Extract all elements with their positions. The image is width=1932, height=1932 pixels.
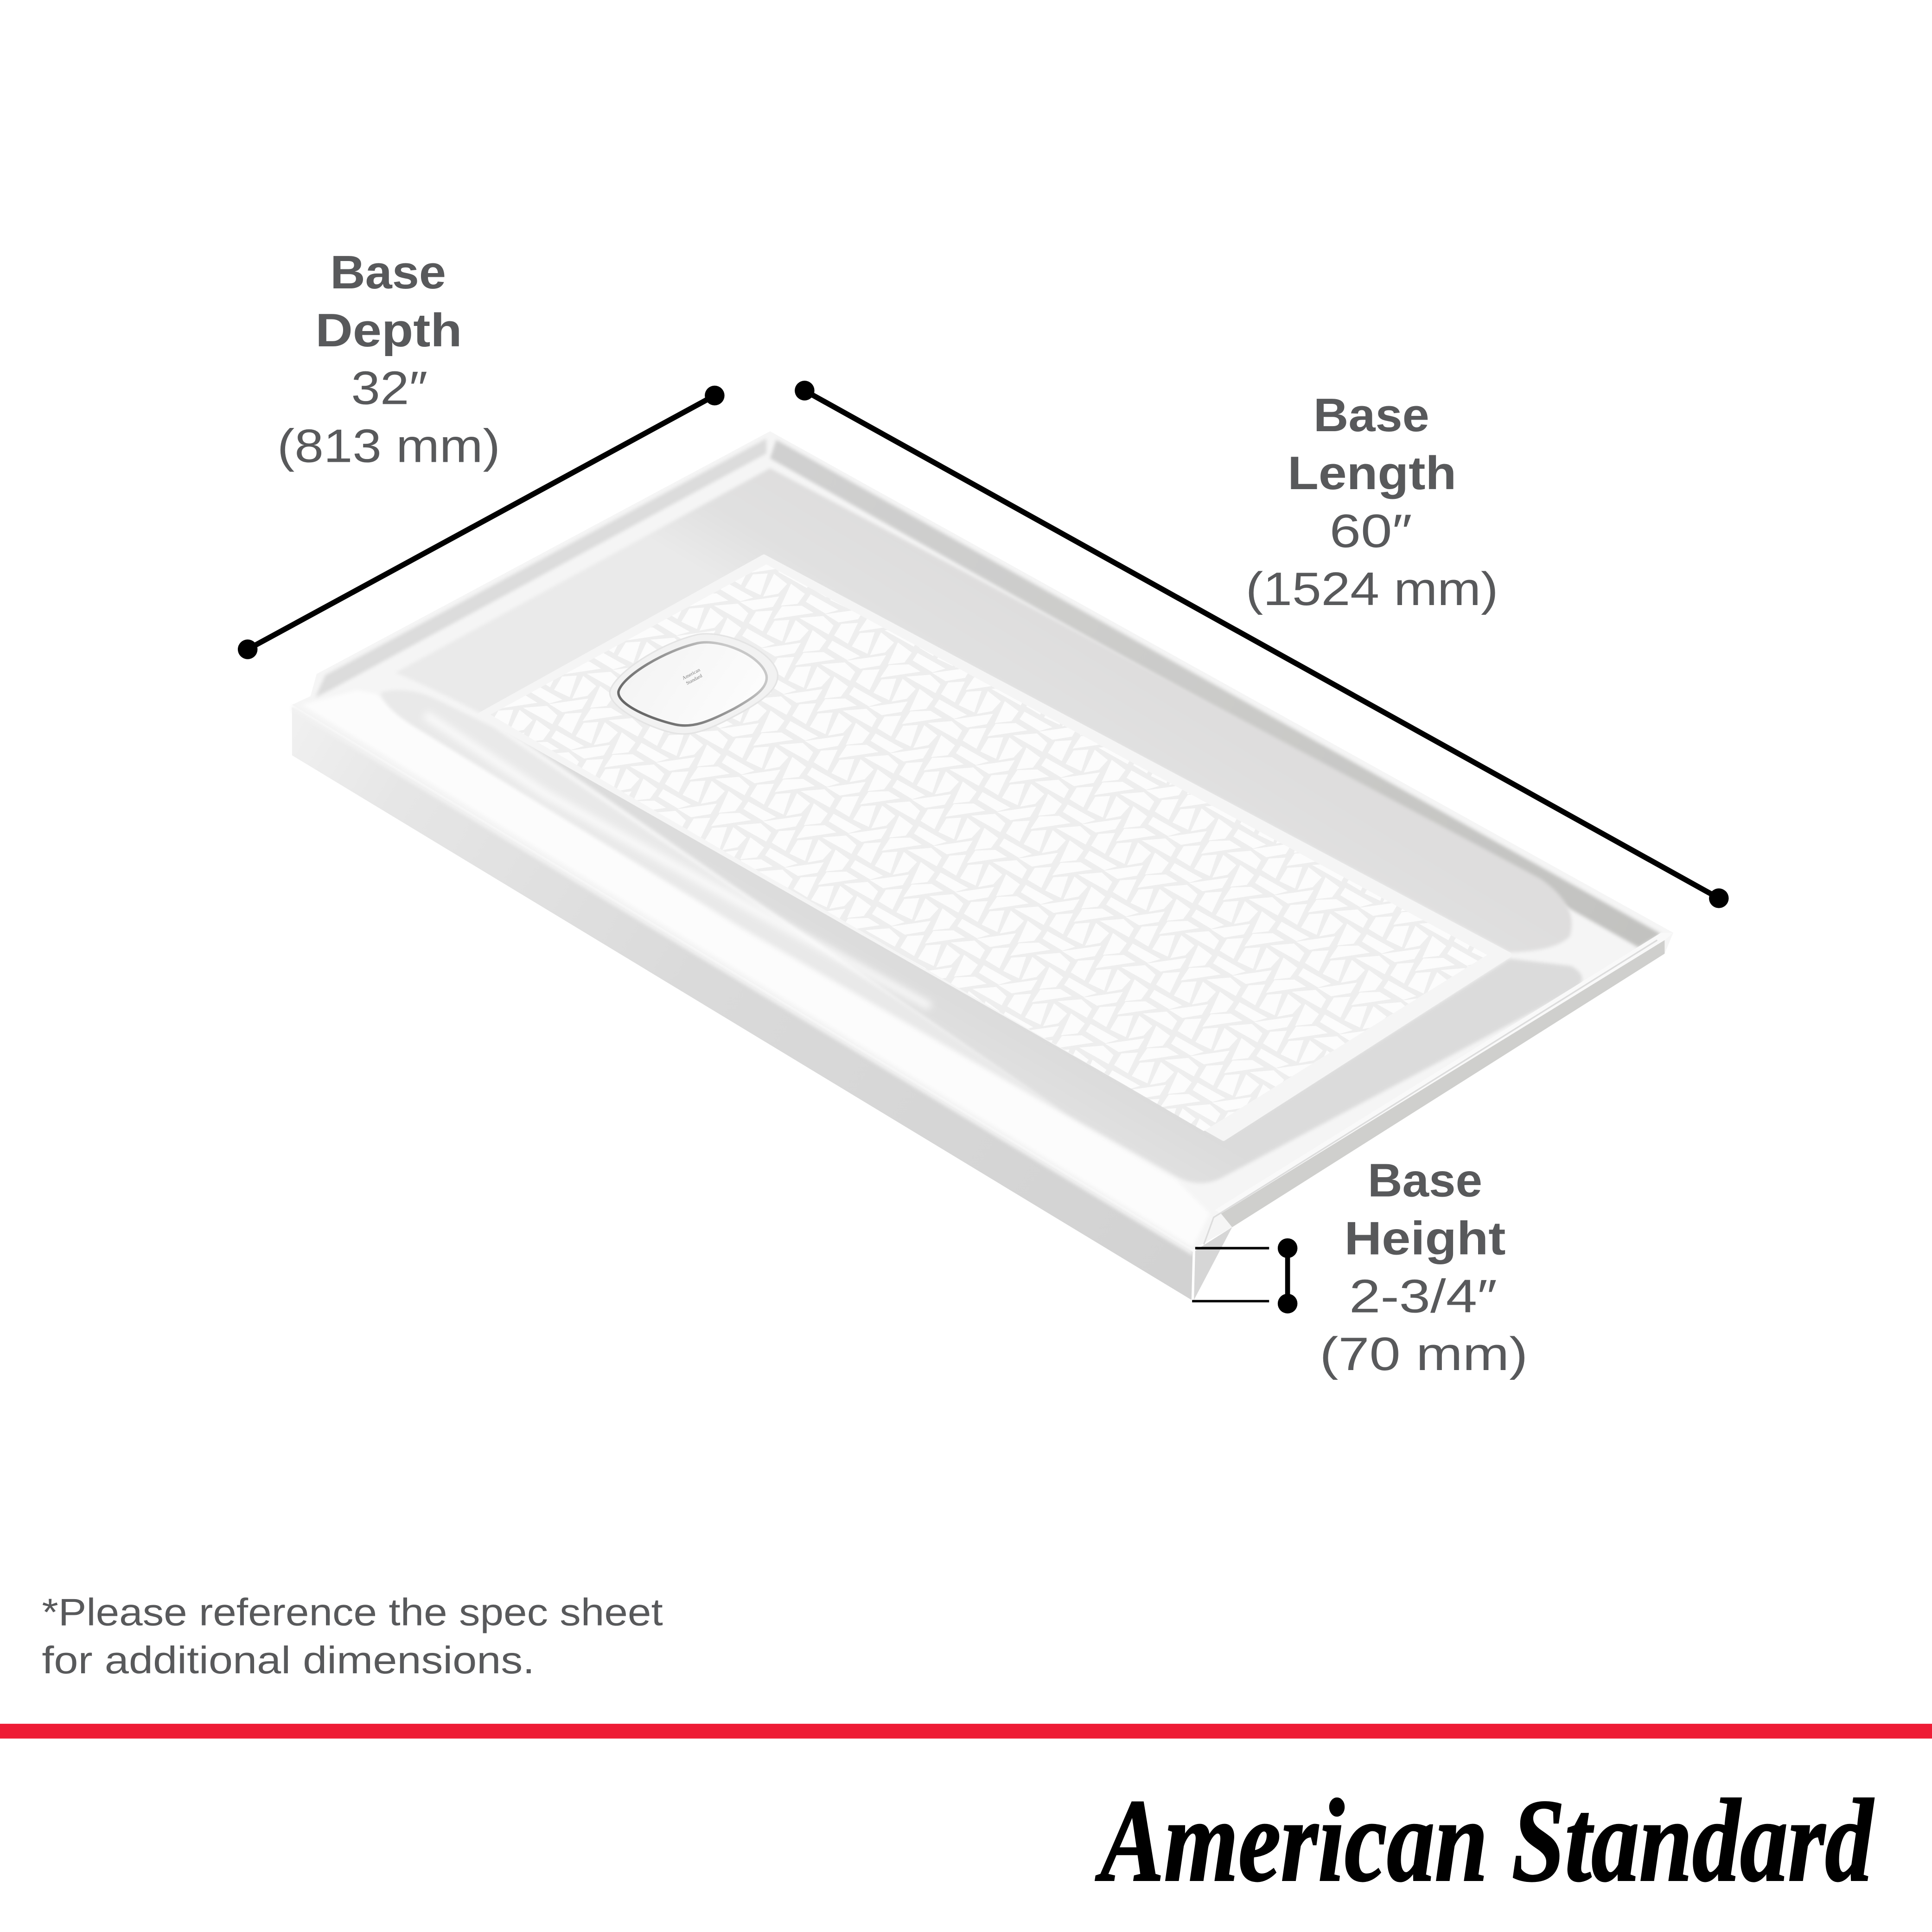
label: base height bbox=[1320, 1154, 1528, 1380]
label: base height: 2-3/4″ bbox=[1349, 1270, 1497, 1322]
label: base depth: (813 mm) bbox=[277, 421, 500, 472]
back wall band bbox=[770, 440, 1661, 948]
threshold top bbox=[302, 690, 1210, 1247]
drain cover bbox=[618, 642, 767, 726]
threshold highlight bbox=[425, 714, 930, 1007]
right rim bbox=[1215, 933, 1673, 1214]
floor tread pattern bbox=[1127, 1086, 1205, 1131]
footnote: for additional dimensions. bbox=[42, 1639, 535, 1682]
label: base height: Height bbox=[1344, 1212, 1505, 1264]
right rim inner line bbox=[1204, 940, 1657, 1244]
label: base height: (70 mm) bbox=[1320, 1328, 1528, 1380]
label: base depth bbox=[277, 247, 500, 472]
label: base length: 60″ bbox=[1329, 505, 1412, 557]
dimension line: base length bbox=[795, 381, 1729, 908]
drain logo: American bbox=[682, 667, 701, 681]
label: base depth: Depth bbox=[315, 305, 462, 357]
drain logo bbox=[682, 667, 704, 687]
dimension line: base height bbox=[1192, 1238, 1297, 1314]
shower base tray bbox=[292, 431, 1673, 1300]
footnote bbox=[42, 1591, 663, 1682]
right outer face bbox=[1221, 940, 1664, 1227]
label: base length bbox=[1246, 389, 1498, 615]
label: base length: Length bbox=[1288, 447, 1456, 499]
end wedge bbox=[1194, 1227, 1232, 1300]
textured floor bbox=[480, 557, 1509, 1139]
drain surround bbox=[610, 634, 778, 734]
dimension line: base depth bbox=[238, 386, 725, 659]
footnote: *Please reference the spec sheet bbox=[42, 1591, 663, 1633]
lower basin slope bbox=[491, 718, 1582, 1183]
tray silhouette bbox=[292, 431, 1673, 1250]
label: base length: (1524 mm) bbox=[1246, 563, 1498, 615]
label: base depth: 32″ bbox=[351, 363, 427, 414]
label: base depth: Base bbox=[330, 247, 446, 299]
front face bbox=[292, 707, 1192, 1300]
depth wall band bbox=[315, 439, 766, 697]
label: base height: Base bbox=[1368, 1154, 1482, 1206]
drain logo: Standard bbox=[685, 673, 703, 686]
label: base length: Base bbox=[1314, 389, 1429, 441]
front bevel bbox=[292, 705, 1192, 1256]
threshold lip bbox=[381, 690, 1066, 1114]
upper basin slope bbox=[395, 468, 1572, 952]
red divider bar bbox=[0, 1724, 1932, 1739]
